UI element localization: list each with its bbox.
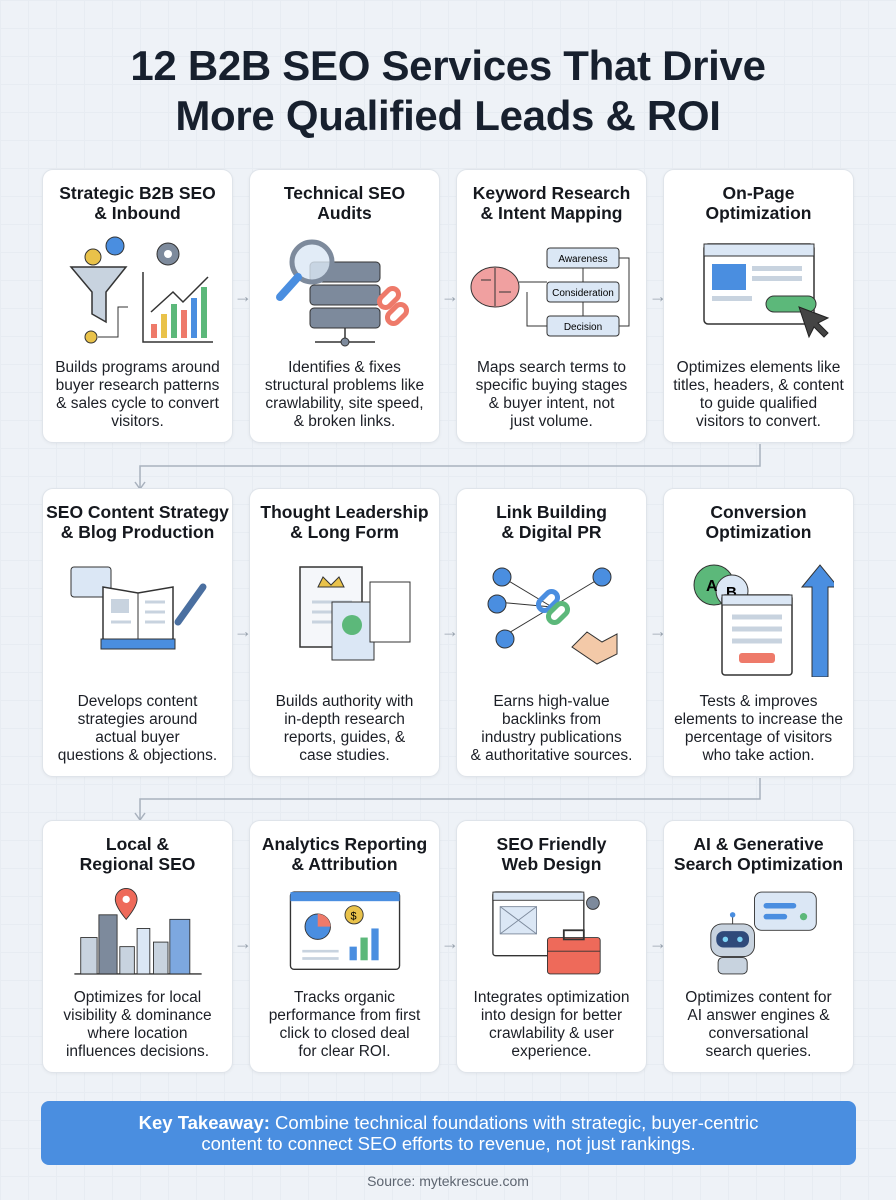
card: Keyword Research: specific buying stages [476, 377, 627, 394]
card: Local & Regional SEO: Local & [106, 834, 169, 854]
card: Thought Leadership: in-depth research [284, 711, 405, 728]
card: AI & Generative Search [663, 820, 854, 1073]
card: Link Building: Earns high-value [493, 693, 610, 710]
icon: brain and flow [470, 248, 630, 336]
arrow: → [234, 621, 252, 641]
card: Thought Leadership: Thought Leadership [260, 502, 429, 522]
card: SEO Friendly Web Design: into design for better [481, 1007, 622, 1024]
key takeaway banner: Key Takeaway: Combine technical foundations with strategic, buyer-centric [139, 1112, 758, 1133]
card: AI & Generative Search: Optimizes content for [685, 989, 832, 1006]
arrow: → [234, 286, 252, 306]
icon: server, magnifier, broken link [276, 240, 409, 346]
card: SEO Friendly Web Design: crawlability & user [489, 1025, 614, 1042]
card: Keyword Research: just volume. [510, 413, 593, 430]
card: Analytics Reporting: for clear ROI. [298, 1043, 391, 1060]
card: Local & Regional SEO: Optimizes for local [74, 989, 201, 1006]
card: SEO Friendly Web Design [456, 820, 647, 1073]
card: SEO Content Strategy: questions & objections. [58, 747, 217, 764]
card: Strategic B2B SEO: buyer research patterns [56, 377, 219, 394]
title: 12 B2B SEO Services That Drive [130, 42, 766, 89]
icon: funnel and chart [70, 236, 213, 344]
icon: brain and flow: Awareness [558, 254, 608, 265]
card: Technical SEO Audits: & broken links. [294, 413, 395, 430]
card: Technical SEO Audits: Technical SEO [284, 183, 405, 203]
card: Link Building [456, 488, 647, 777]
card: Conversion Optimization: Conversion [710, 502, 807, 522]
card: On-Page Optimization: Optimization [706, 203, 811, 223]
key takeaway banner: content to connect SEO efforts to revenue, not just rankings. [201, 1133, 696, 1154]
card: SEO Content Strategy: strategies around [78, 711, 197, 728]
card: On-Page Optimization: On-Page [723, 183, 794, 203]
icon: documents with crown [299, 566, 410, 660]
card: Technical SEO Audits: Identifies & fixes [288, 359, 401, 376]
card: Analytics Reporting: & Attribution [291, 854, 398, 874]
icon: open book and pen [70, 566, 206, 650]
card: Thought Leadership: reports, guides, & [284, 729, 405, 746]
card: Strategic B2B SEO: Strategic B2B SEO [59, 183, 216, 203]
icon: dashboard: $ [350, 910, 357, 922]
arrow: → [649, 621, 667, 641]
card: Strategic B2B SEO: & Inbound [94, 203, 181, 223]
arrow: → [649, 286, 667, 306]
icon: network, chain, handshake [488, 568, 618, 665]
connector: row1 to row2 [134, 444, 761, 488]
card: Conversion Optimization: who take action. [702, 747, 814, 764]
card: Conversion Optimization: percentage of visitors [685, 729, 832, 746]
card: SEO Content Strategy [42, 488, 233, 777]
card: Local & Regional SEO: influences decisions. [66, 1043, 209, 1060]
card: Link Building: & Digital PR [501, 522, 602, 542]
card: SEO Friendly Web Design: experience. [511, 1043, 592, 1060]
card: On-Page Optimization [663, 169, 854, 443]
card: Keyword Research: & buyer intent, not [489, 395, 614, 412]
arrow: → [649, 933, 667, 953]
card: Link Building: Link Building [496, 502, 607, 522]
title [130, 42, 766, 139]
card: Analytics Reporting: performance from first [269, 1007, 420, 1024]
connector: row2 to row3 [134, 778, 761, 820]
icon: robot and chat bubble [710, 892, 817, 974]
card: Keyword Research [456, 169, 647, 443]
card: Thought Leadership [249, 488, 440, 777]
arrow: → [441, 933, 459, 953]
card: Link Building: backlinks from [502, 711, 601, 728]
icon: brain and flow: Decision [564, 322, 602, 333]
icon: city with pin [74, 888, 202, 975]
card: AI & Generative Search: search queries. [706, 1043, 811, 1060]
card: Local & Regional SEO: where location [88, 1025, 187, 1042]
card: On-Page Optimization: visitors to convert. [696, 413, 821, 430]
card: On-Page Optimization: to guide qualified [700, 395, 817, 412]
card: Thought Leadership: Builds authority with [276, 693, 413, 710]
card: SEO Content Strategy: & Blog Production [61, 522, 214, 542]
card: Link Building: & authoritative sources. [470, 747, 632, 764]
card: SEO Friendly Web Design: Integrates optimization [474, 989, 629, 1006]
card: Thought Leadership: & Long Form [290, 522, 399, 542]
card: Local & Regional SEO: visibility & dominance [63, 1007, 212, 1024]
card: Technical SEO Audits: crawlability, site speed, [265, 395, 424, 412]
card: Strategic B2B SEO: visitors. [111, 413, 164, 430]
card: Keyword Research: & Intent Mapping [481, 203, 622, 223]
card: Technical SEO Audits: structural problems like [265, 377, 424, 394]
card: SEO Friendly Web Design: Web Design [502, 854, 601, 874]
card: SEO Content Strategy: actual buyer [95, 729, 180, 746]
icon: wireframe and toolbox [492, 891, 601, 974]
icon: A/B test and arrow [694, 564, 834, 677]
card: Technical SEO Audits [249, 169, 440, 443]
card: Strategic B2B SEO [42, 169, 233, 443]
card: Thought Leadership: case studies. [299, 747, 390, 764]
card: AI & Generative Search: AI & Generative [693, 834, 824, 854]
card: Technical SEO Audits: Audits [317, 203, 372, 223]
card: On-Page Optimization: Optimizes elements like [677, 359, 840, 376]
card: Local & Regional SEO [42, 820, 233, 1073]
icon: A/B test and arrow: B [726, 584, 737, 601]
card: SEO Friendly Web Design: SEO Friendly [497, 834, 606, 854]
card: Keyword Research: Maps search terms to [477, 359, 626, 376]
key takeaway banner [41, 1101, 856, 1165]
card: Conversion Optimization: Optimization [706, 522, 811, 542]
arrow: → [234, 933, 252, 953]
card: AI & Generative Search: conversational [709, 1025, 808, 1042]
icon: browser with cursor [703, 243, 830, 338]
card: Local & Regional SEO: Regional SEO [80, 854, 195, 874]
card: Strategic B2B SEO: & sales cycle to convert [56, 395, 219, 412]
card: AI & Generative Search: AI answer engines & [687, 1007, 830, 1024]
card: SEO Content Strategy: Develops content [78, 693, 197, 710]
card: Analytics Reporting [249, 820, 440, 1073]
card: Conversion Optimization: elements to increase the [674, 711, 843, 728]
source: Source: mytekrescue.com [367, 1173, 529, 1189]
card: SEO Content Strategy: SEO Content Strategy [46, 502, 229, 522]
card: Link Building: industry publications [481, 729, 622, 746]
card: Analytics Reporting: Analytics Reporting [262, 834, 427, 854]
card: AI & Generative Search: Search Optimization [674, 854, 843, 874]
icon: brain and flow: Consideration [552, 288, 614, 299]
arrow: → [441, 286, 459, 306]
card: On-Page Optimization: titles, headers, & content [673, 377, 844, 394]
card: Conversion Optimization: Tests & improves [699, 693, 818, 710]
title: More Qualified Leads & ROI [175, 92, 721, 139]
card: Analytics Reporting: click to closed deal [279, 1025, 410, 1042]
icon: dashboard [290, 891, 400, 970]
card: Analytics Reporting: Tracks organic [294, 989, 395, 1006]
card: Conversion Optimization [663, 488, 854, 777]
arrow: → [441, 621, 459, 641]
card: Keyword Research: Keyword Research [473, 183, 630, 203]
card: Strategic B2B SEO: Builds programs around [55, 359, 220, 376]
icon: A/B test and arrow: A [706, 578, 718, 595]
